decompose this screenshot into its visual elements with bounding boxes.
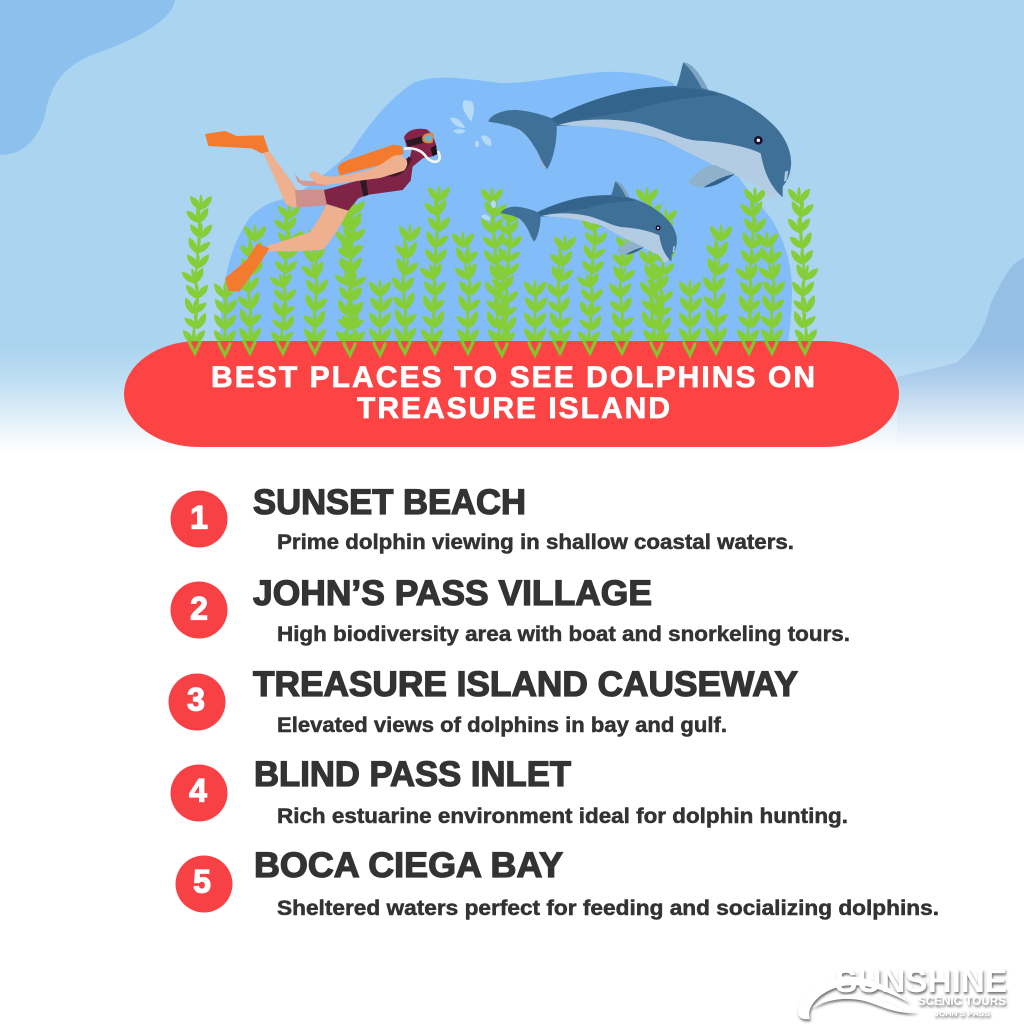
number badge 5: 5 <box>193 864 211 900</box>
heading 3: TREASURE ISLAND CAUSEWAY <box>253 665 798 704</box>
logo: Sunshine Scenic Tours <box>798 963 1007 1019</box>
plant roots over pill <box>189 341 810 355</box>
water splash <box>450 100 496 220</box>
description 2: High biodiversity area with boat and snorkeling tours. <box>277 623 850 646</box>
rear thigh <box>295 189 329 208</box>
heading 5: BOCA CIEGA BAY <box>254 846 563 885</box>
heading 4: BLIND PASS INLET <box>254 755 571 794</box>
white fade to page <box>0 345 1024 452</box>
back hand <box>295 174 327 186</box>
upper fin <box>205 131 269 153</box>
number badge 1: 1 <box>190 500 208 536</box>
title text: TREASURE ISLAND <box>357 392 670 425</box>
front leg <box>267 204 348 251</box>
title text: BEST PLACES TO SEE DOLPHINS ON <box>211 361 815 394</box>
background sky <box>0 0 1024 452</box>
right wave <box>897 258 1024 452</box>
list item 1 <box>170 483 794 554</box>
top-left corner wave <box>0 0 175 155</box>
rear leg <box>263 152 297 207</box>
heading 1: SUNSET BEACH <box>253 483 526 522</box>
hood <box>404 129 437 158</box>
number badge 4: 4 <box>189 772 207 808</box>
number badge 1 <box>170 490 228 548</box>
number badge 3: 3 <box>187 682 205 718</box>
number badge 5 <box>176 856 232 912</box>
number badge 2 <box>170 582 228 638</box>
goggles <box>422 133 434 143</box>
heading 2: JOHN’S PASS VILLAGE <box>253 574 652 613</box>
description 3: Elevated views of dolphins in bay and gulf. <box>277 714 727 737</box>
central water blob <box>220 72 792 350</box>
front arm <box>308 155 407 185</box>
lower fin <box>225 243 269 292</box>
title pill <box>124 341 899 447</box>
snorkel <box>405 148 440 162</box>
description 1: Prime dolphin viewing in shallow coastal waters. <box>277 531 794 554</box>
air tank <box>337 145 404 175</box>
logo: Sunshine Scenic Tours: SUNSHINE <box>835 963 1007 999</box>
description 4: Rich estuarine environment ideal for dolphin hunting. <box>277 805 848 828</box>
icon: large dolphin <box>488 63 791 200</box>
icon: scuba diver <box>205 129 440 292</box>
list item 4 <box>170 755 848 828</box>
description 5: Sheltered waters perfect for feeding and socializing dolphins. <box>277 897 939 920</box>
logo: Sunshine Scenic Tours: JOHN'S PASS <box>934 1011 990 1018</box>
list item 2 <box>170 574 850 646</box>
seagrass plants <box>181 185 819 358</box>
number badge 4 <box>170 764 228 822</box>
list item 5 <box>176 846 939 920</box>
mask <box>431 145 437 157</box>
list item 3 <box>168 665 798 737</box>
title text <box>211 361 815 425</box>
logo: Sunshine Scenic Tours: SCENIC TOURS <box>918 994 1006 1008</box>
number badge 2: 2 <box>190 590 208 626</box>
number badge 3 <box>168 674 226 730</box>
icon: small dolphin <box>500 179 678 263</box>
wetsuit <box>324 150 423 211</box>
